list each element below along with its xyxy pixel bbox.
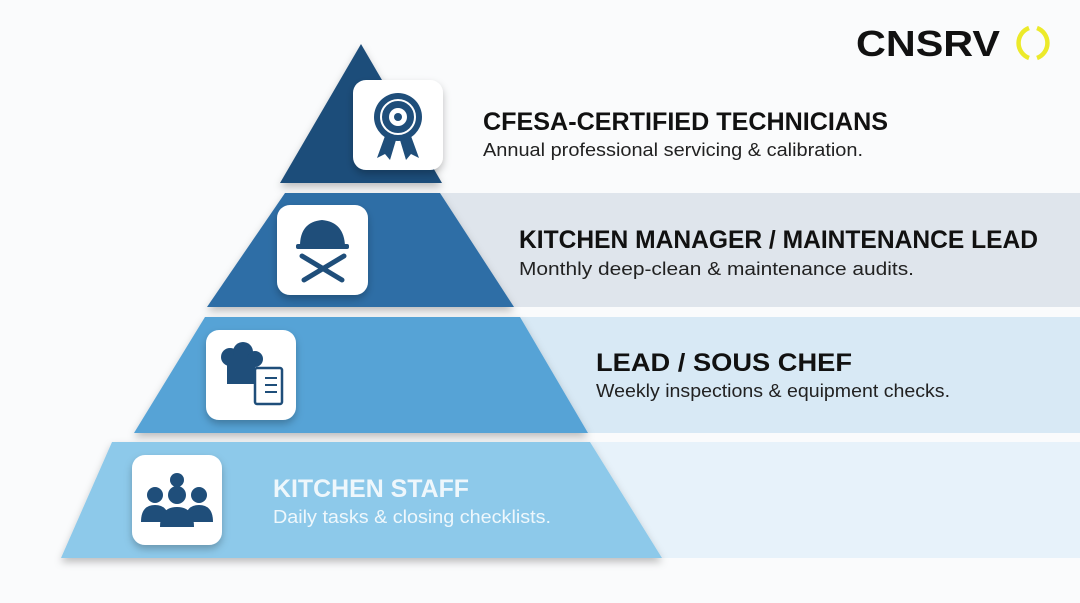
pyramid tier 1: [280, 44, 442, 183]
band: tier 4: [590, 442, 1080, 558]
pyramid tier 2: [207, 193, 514, 307]
text: tier 3: Weekly inspections & equipment checks.: [596, 381, 950, 401]
icon: chef hat with clipboard: [206, 330, 296, 420]
text: tier 4: KITCHEN STAFF: [273, 475, 469, 503]
text: tier 1: Annual professional servicing & calibration.: [483, 140, 863, 160]
text: tier 3: [596, 349, 950, 401]
logo: CNSRV: [856, 23, 1000, 64]
pyramid tier 3: [134, 317, 588, 433]
band: tier 2: [440, 193, 1080, 307]
text: tier 3: LEAD / SOUS CHEF: [596, 349, 852, 377]
text: tier 4: [273, 475, 551, 527]
text: tier 2: [519, 226, 1038, 279]
pyramid tier 4: [61, 442, 662, 558]
text: tier 1: CFESA-CERTIFIED TECHNICIANS: [483, 108, 888, 136]
icon: hard hat and tools: [277, 205, 368, 295]
band: tier 3: [520, 317, 1080, 433]
icon: certified badge: [353, 80, 443, 170]
text: tier 4: Daily tasks & closing checklists.: [273, 507, 551, 527]
icon: kitchen staff group: [132, 455, 222, 545]
text: tier 1: [483, 108, 888, 160]
logo: [856, 23, 1047, 64]
text: tier 2: Monthly deep-clean & maintenance audits.: [519, 259, 914, 279]
text: tier 2: KITCHEN MANAGER / MAINTENANCE LEAD: [519, 226, 1038, 254]
